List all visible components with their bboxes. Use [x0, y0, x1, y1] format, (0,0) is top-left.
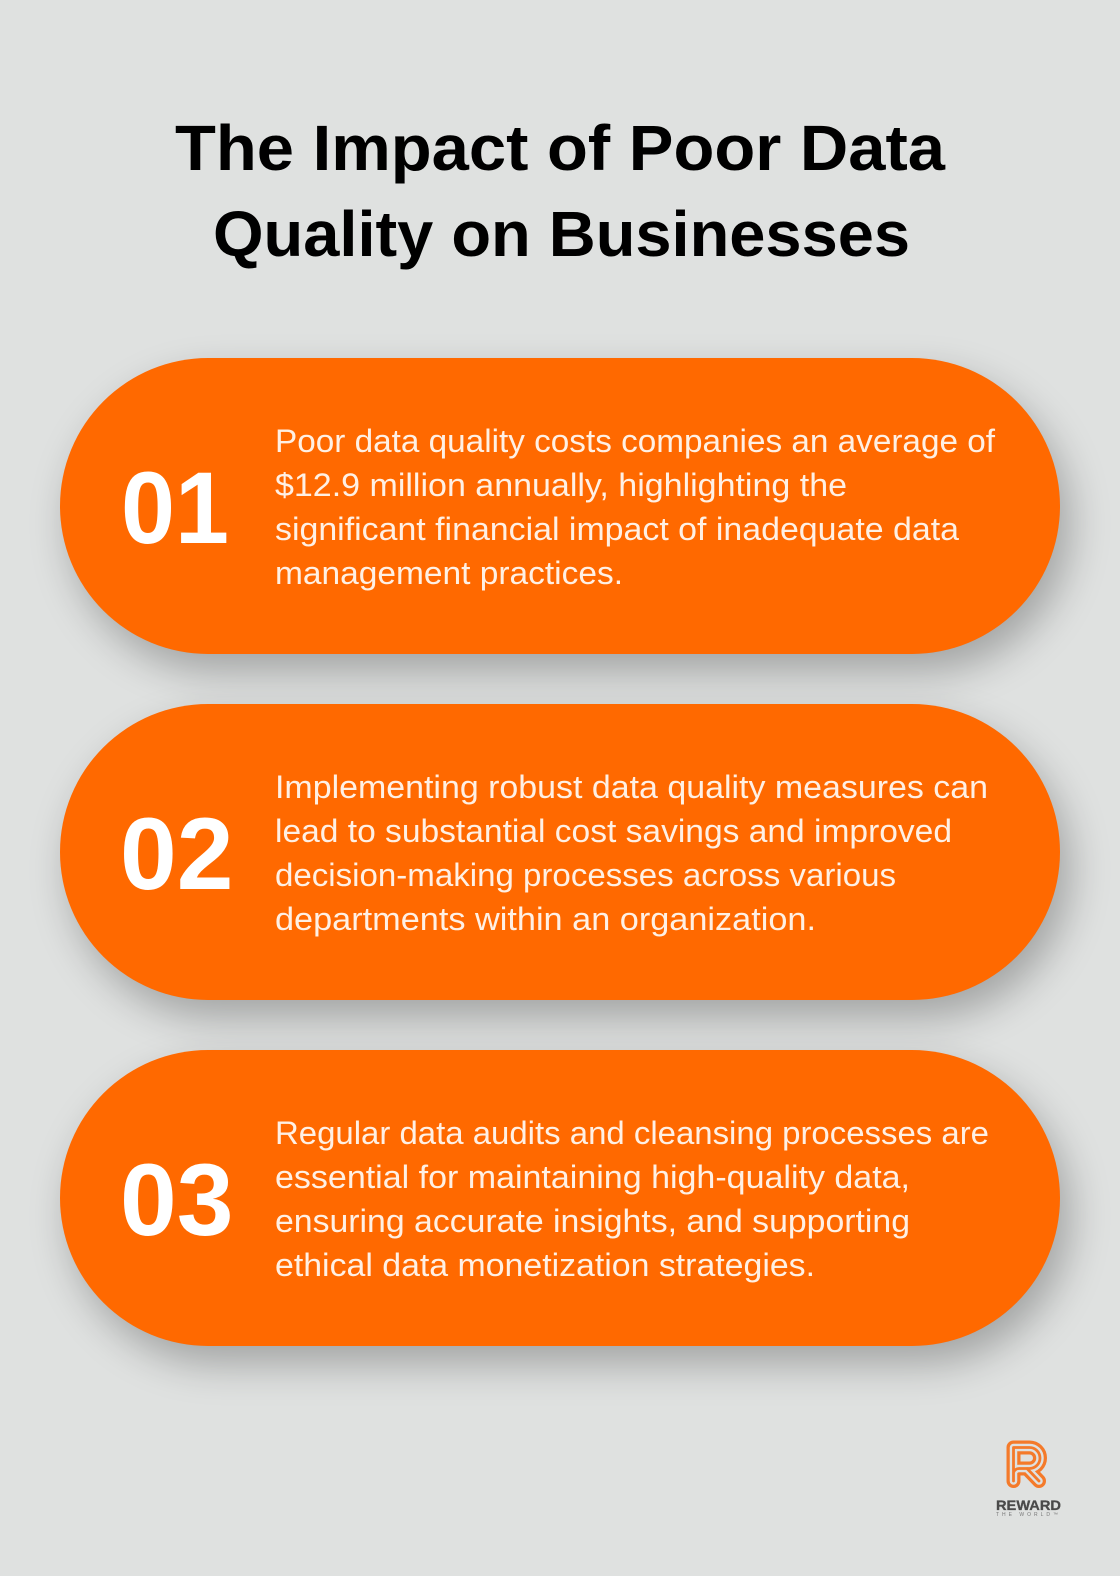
text block 01: management practices. [275, 555, 623, 591]
panel: item 02 [60, 704, 1060, 1000]
panel: item 01 [60, 358, 1060, 654]
text block 03 [275, 1115, 989, 1283]
logo wordmark: REWARD [996, 1497, 1061, 1513]
number 02: 02 [120, 797, 233, 911]
text block 02: decision-making processes across various [275, 857, 896, 893]
title: The Impact of Poor Data [175, 112, 945, 184]
panel: item 03 [60, 1050, 1060, 1346]
text block 01 [275, 423, 995, 591]
text block 01: Poor data quality costs companies an average of [275, 423, 995, 459]
text block 03: Regular data audits and cleansing processes are [275, 1115, 989, 1151]
title [175, 112, 946, 270]
icon: stylised R [1014, 1448, 1040, 1481]
text block 03: ensuring accurate insights, and supporting [275, 1203, 910, 1239]
number 03: 03 [120, 1143, 233, 1257]
text block 02: lead to substantial cost savings and improved [275, 813, 952, 849]
title: Quality on Businesses [213, 198, 910, 270]
text block 01: $12.9 million annually, highlighting the [275, 467, 847, 503]
text block 03: ethical data monetization strategies. [275, 1247, 815, 1283]
text block 03: essential for maintaining high-quality data, [275, 1159, 910, 1195]
text block 01: significant financial impact of inadequate data [275, 511, 959, 547]
number 01: 01 [121, 451, 229, 565]
text block 02 [275, 769, 988, 937]
text block 02: departments within an organization. [275, 901, 816, 937]
logo tagline: THE WORLD™ [996, 1512, 1058, 1518]
text block 02: Implementing robust data quality measures can [275, 769, 988, 805]
